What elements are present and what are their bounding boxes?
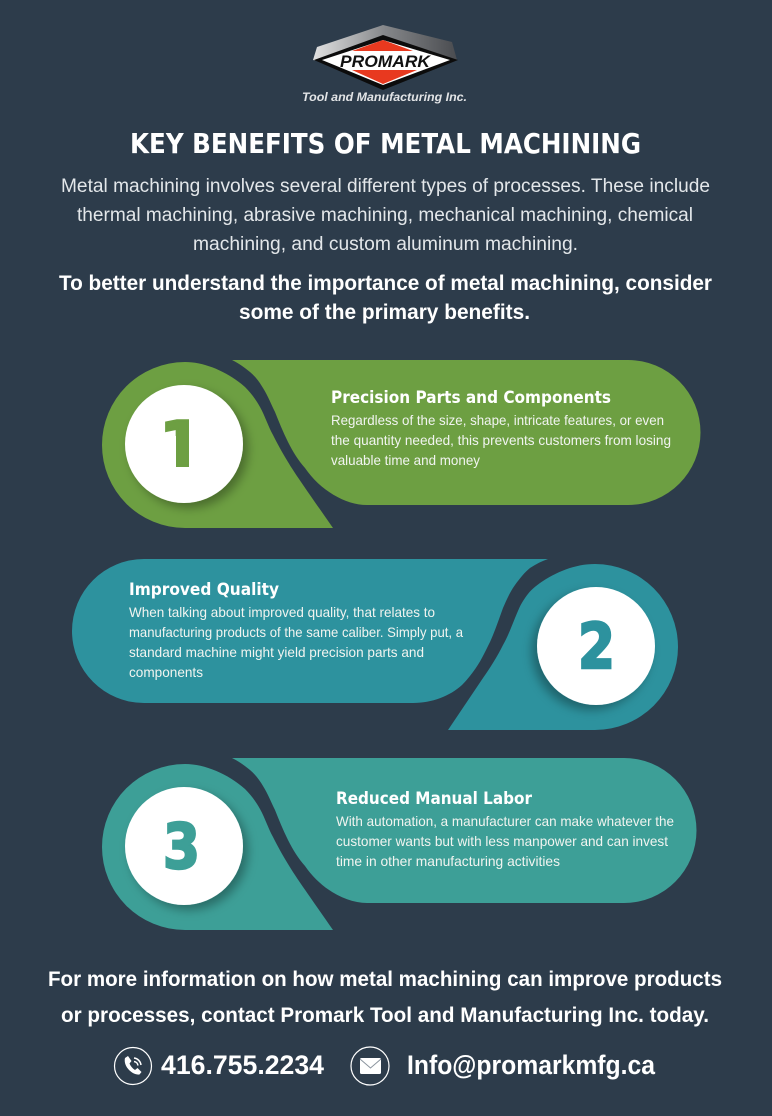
card 2 text: When talking about improved quality, that relates to [129,605,435,620]
title: KEY BENEFITS OF METAL MACHINING [130,127,641,160]
card 2 text: manufacturing products of the same caliber. Simply put, a [129,625,463,640]
number tab 1 [102,362,333,528]
closing statement: or processes, contact Promark Tool and Manufacturing Inc. today. [61,1004,709,1027]
intro paragraph [61,176,710,255]
logo: Promark Tool and Manufacturing [302,25,467,104]
number badge 1 [125,385,243,503]
icon: envelope [351,1047,389,1085]
card 1 text: Precision Parts and Components [331,388,611,407]
closing statement [48,968,722,1027]
intro paragraph: Metal machining involves several different types of processes. These include [61,176,710,197]
phone number: 416.755.2234 [161,1050,324,1080]
icon: phone [114,1048,152,1084]
card 3 text: time in other manufacturing activities [336,854,560,869]
number tab 2 [448,564,678,730]
number badge 1: 1 [159,408,203,481]
logo: Promark Tool and Manufacturing: Tool and Manufacturing Inc. [302,92,467,104]
panel: benefit 3 [102,758,696,930]
number badge 3: 3 [163,810,200,883]
card 1 text: the quantity needed, this prevents customers from losing [331,433,671,448]
card 3 text [336,789,674,869]
card 3 text: With automation, a manufacturer can make whatever the [336,814,674,829]
subheading: some of the primary benefits. [239,301,530,324]
number tab 3 [102,764,333,930]
closing statement: For more information on how metal machining can improve products [48,968,722,991]
card 1 text: valuable time and money [331,453,480,468]
panel: benefit 1 [102,360,700,528]
intro paragraph: thermal machining, abrasive machining, mechanical machining, chemical [77,205,693,226]
subheading [59,272,712,324]
panel: benefit 2 [72,559,678,730]
card 2 text: Improved Quality [129,580,279,599]
card 1 text [331,388,671,468]
intro paragraph: machining, and custom aluminum machining. [193,234,578,255]
card 2 text [129,580,463,680]
card 3 background [232,758,696,903]
email address: Info@promarkmfg.ca [407,1050,656,1080]
card 3 text: Reduced Manual Labor [336,789,533,808]
number badge 3 [125,787,243,905]
number badge 2: 2 [578,610,615,683]
logo: Promark Tool and Manufacturing: PROMARK [340,53,431,71]
subheading: To better understand the importance of metal machining, consider [59,272,712,295]
card 2 background [72,559,548,703]
card 2 text: standard machine might yield precision parts and [129,645,424,660]
card 1 background [232,360,700,505]
card 3 text: customer wants but with less manpower and can invest [336,834,668,849]
number badge 2 [537,587,655,705]
card 1 text: Regardless of the size, shape, intricate features, or even [331,413,664,428]
card 2 text: components [129,665,203,680]
